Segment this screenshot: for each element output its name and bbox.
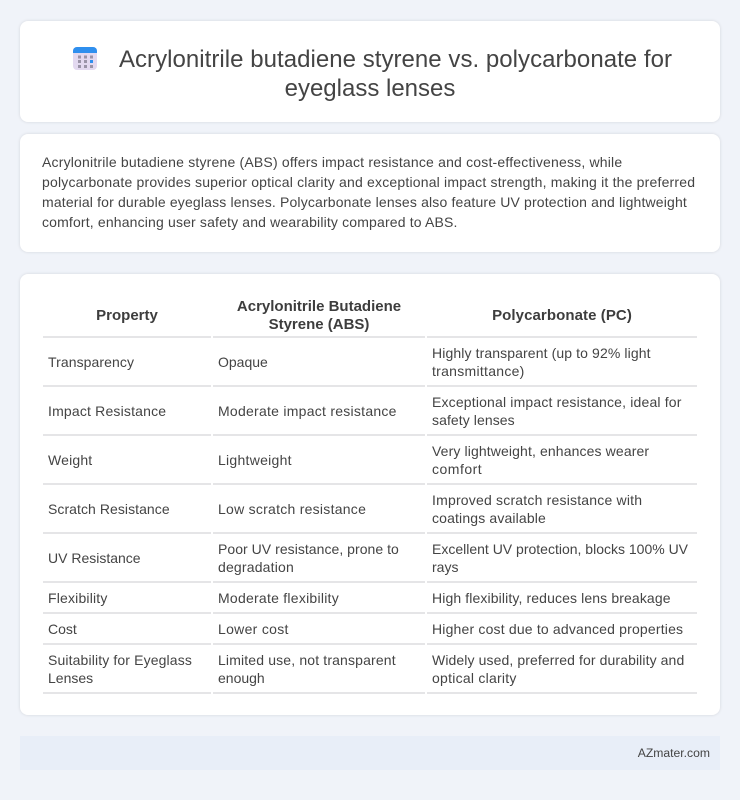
summary text: comfort, enhancing user safety and wearability compared to ABS. [42, 214, 458, 230]
row: suitability for eyeglass lenses: Widely used, preferred for durability and [432, 652, 684, 668]
row: weight: comfort [432, 461, 482, 477]
summary text [42, 154, 695, 230]
row: flexibility: Moderate flexibility [218, 590, 339, 606]
row: suitability for eyeglass lenses: enough [218, 670, 265, 686]
row: flexibility: High flexibility, reduces lens breakage [432, 590, 671, 606]
row: cost: Lower cost [218, 621, 289, 637]
row: transparency [48, 345, 651, 379]
row: scratch resistance [48, 492, 642, 526]
row: UV resistance: Poor UV resistance, prone to [218, 541, 399, 557]
row: scratch resistance: Low scratch resistance [218, 501, 366, 517]
row: UV resistance: rays [432, 559, 458, 575]
panel: title card [20, 21, 720, 122]
row: suitability for eyeglass lenses: Lenses [48, 670, 93, 686]
row: weight: Weight [48, 452, 92, 468]
row: impact resistance: Moderate impact resistance [218, 403, 397, 419]
row: transparency: Highly transparent (up to 92% light [432, 345, 651, 361]
row: UV resistance: degradation [218, 559, 294, 575]
footer bar [20, 736, 720, 770]
row: flexibility [48, 590, 671, 606]
table header: Property [96, 307, 158, 324]
row: flexibility: Flexibility [48, 590, 108, 606]
panel: summary card [20, 134, 720, 252]
table header [96, 298, 632, 333]
row: weight: Very lightweight, enhances wearer [432, 443, 649, 459]
row: impact resistance: Exceptional impact resistance, ideal for [432, 394, 682, 410]
row: suitability for eyeglass lenses: optical clarity [432, 670, 517, 686]
row: transparency: Opaque [218, 354, 268, 370]
row: suitability for eyeglass lenses: Limited use, not transparent [218, 652, 396, 668]
row: UV resistance: Excellent UV protection, blocks 100% UV [432, 541, 688, 557]
summary text: polycarbonate provides superior optical clarity and exceptional impact strength, making it the preferred [42, 174, 695, 190]
table header: Polycarbonate (PC) [492, 307, 632, 324]
summary text: Acrylonitrile butadiene styrene (ABS) offers impact resistance and cost-effectiveness, while [42, 154, 622, 170]
row: scratch resistance: Scratch Resistance [48, 501, 170, 517]
row: weight [48, 443, 649, 477]
row: impact resistance: Impact Resistance [48, 403, 166, 419]
row: suitability for eyeglass lenses [48, 652, 684, 686]
icon: calendar [73, 47, 97, 70]
table header: Styrene (ABS) [269, 316, 369, 333]
row: impact resistance [48, 394, 682, 428]
row: weight: Lightweight [218, 452, 292, 468]
row: impact resistance: safety lenses [432, 412, 515, 428]
row: scratch resistance: Improved scratch resistance with [432, 492, 642, 508]
row: UV resistance: UV Resistance [48, 550, 141, 566]
summary text: material for durable eyeglass lenses. Polycarbonate lenses also feature UV protection and lightweight [42, 194, 687, 210]
title second line: eyeglass lenses [285, 75, 455, 102]
row: cost [48, 621, 683, 637]
row: cost: Higher cost due to advanced properties [432, 621, 683, 637]
row: scratch resistance: coatings available [432, 510, 546, 526]
row: cost: Cost [48, 621, 77, 637]
row: UV resistance [48, 541, 688, 575]
row: transparency: Transparency [48, 354, 134, 370]
panel: comparison table card [20, 274, 720, 715]
footer credit: AZmater.com [638, 746, 710, 760]
table: comparison [43, 298, 697, 694]
row: suitability for eyeglass lenses: Suitability for Eyeglass [48, 652, 192, 668]
title: Acrylonitrile butadiene styrene vs. polycarbonate for [119, 46, 672, 73]
table header: Acrylonitrile Butadiene [237, 298, 401, 315]
row: transparency: transmittance) [432, 363, 525, 379]
